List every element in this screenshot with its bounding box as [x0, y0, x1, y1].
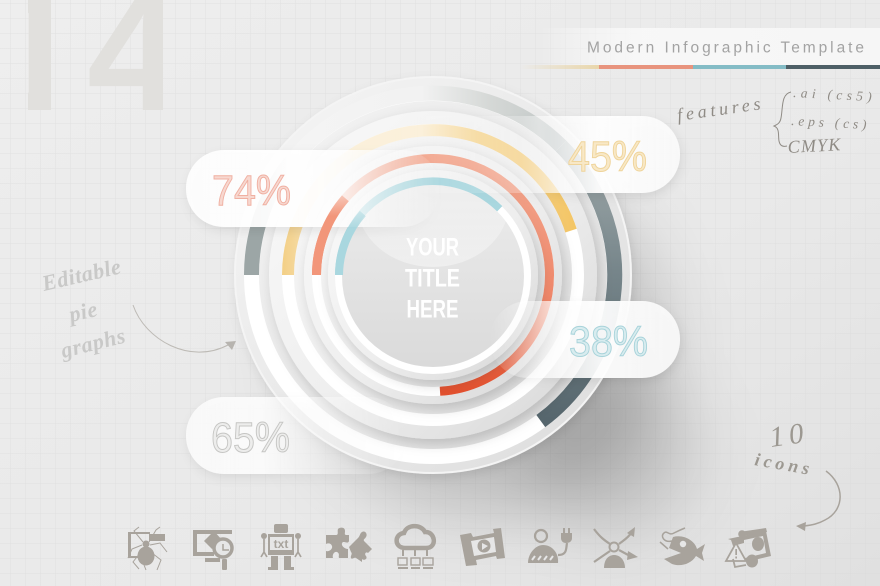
handwritten note: features: features: [676, 93, 765, 125]
callout 65 percent: [186, 397, 406, 474]
icon: robot: [261, 524, 301, 570]
disc 2: [269, 111, 597, 439]
icon: robot: txt: [274, 537, 288, 551]
handwritten note: 10 icons: icons: [753, 449, 815, 479]
ring 74 percent: [316, 158, 550, 392]
header band: [520, 28, 880, 69]
handwritten note: editable pie graphs: pie: [65, 296, 100, 327]
center title: HERE: [406, 296, 458, 324]
callout 38 percent: [490, 301, 680, 378]
handwritten note: features: .ai (cs5): [793, 85, 876, 104]
pie graph rings: [235, 77, 631, 473]
center title: TITLE: [405, 264, 460, 292]
icon: cloud network: [397, 526, 434, 569]
callout 65 percent: 65%: [211, 414, 290, 462]
ring 45 percent: [288, 130, 578, 420]
icon: browser and warning: [726, 528, 771, 568]
outer disc: [235, 77, 631, 473]
cast shadow: [295, 165, 695, 535]
callout 74 percent: [186, 150, 440, 227]
handwritten note: editable pie graphs: [39, 253, 128, 363]
icon: film strip: [460, 528, 505, 566]
handwritten note: editable pie graphs: graphs: [57, 323, 128, 363]
callout 74 percent: 74%: [212, 167, 291, 215]
handwritten note: features: .eps (cs): [791, 113, 871, 132]
callout 45 percent: [390, 116, 680, 193]
handwritten note: features: CMYK: [787, 134, 842, 157]
center title: YOUR: [406, 234, 459, 262]
arc segments above the callout: [316, 198, 363, 275]
disc 3: [304, 146, 562, 404]
handwritten note: 10 icons: [753, 417, 815, 479]
center disc: [342, 185, 524, 367]
icon: crossing arrows: [594, 527, 638, 568]
callout 38 percent: 38%: [569, 318, 648, 366]
disc 4: [328, 170, 538, 380]
icon: monitor with magnifier: [193, 530, 232, 570]
callout 45 percent: 45%: [568, 133, 647, 181]
handwritten note: 10 icons: 10: [768, 417, 811, 454]
header title: Modern Infographic Template: [587, 40, 864, 56]
handwritten note: editable pie graphs: Editable: [39, 253, 124, 296]
handwritten note: features: [676, 85, 876, 157]
icon row: [128, 524, 771, 570]
ring 65 percent: [251, 93, 615, 457]
icon: puzzle pieces: [326, 528, 372, 562]
colour bar: [520, 65, 880, 69]
arrow to icons: [796, 471, 840, 531]
icon: person with plug: [528, 528, 572, 563]
icon: angler fish: [660, 528, 705, 565]
center title: [405, 234, 460, 324]
icon: spider on window: [128, 527, 167, 570]
ring 38 percent: [339, 181, 527, 370]
arrow to pie: [133, 305, 236, 352]
